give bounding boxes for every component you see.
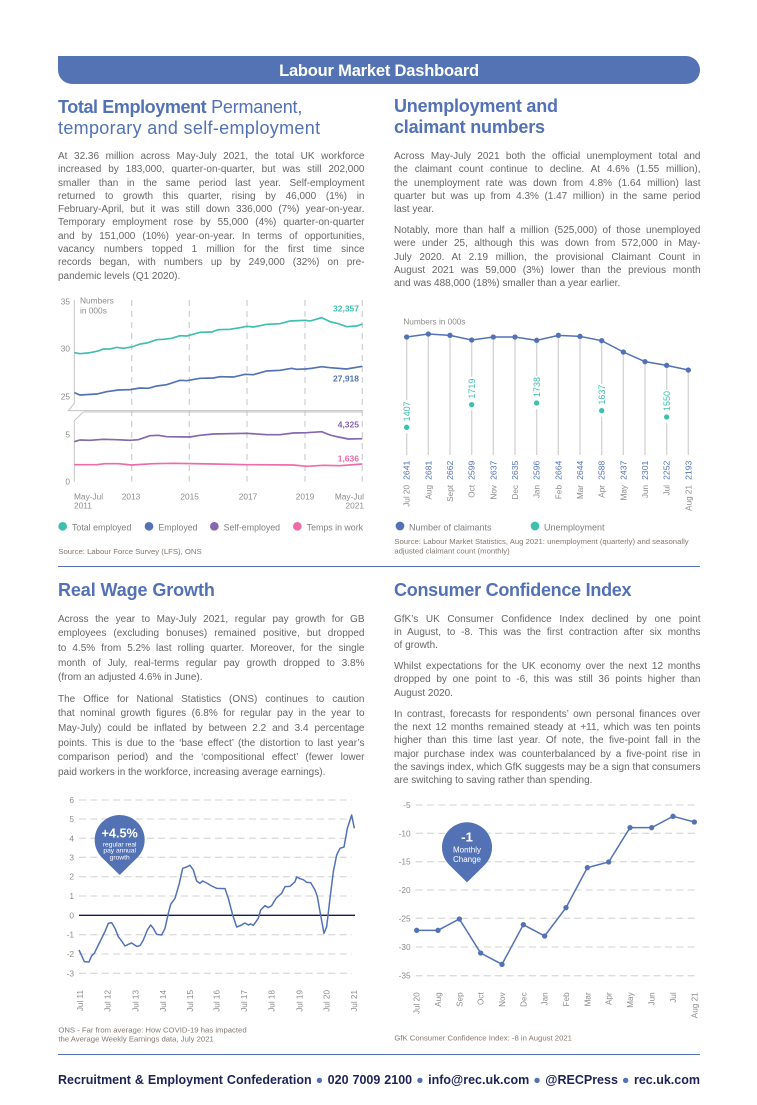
line chart: employment: 2013 bbox=[122, 491, 141, 501]
panel: total employment bbox=[58, 96, 364, 556]
line chart: employment: 4,325 bbox=[338, 419, 359, 429]
line chart: real wage growth: Jul 19 bbox=[295, 990, 304, 1012]
line chart: employment bbox=[58, 296, 364, 556]
line chart: real wage growth: Jul 20 bbox=[323, 990, 332, 1012]
lollipop chart: claimants and unemployment: 1637 bbox=[597, 385, 607, 405]
text block: unemployment first paragraph: last year. bbox=[394, 204, 434, 215]
line chart: real wage growth: ONS - Far from average: How COVID-19 has impacted bbox=[58, 1026, 247, 1035]
text block: unemployment second paragraph: Notably, more than half a million (525,000) of those unemployed bbox=[394, 225, 700, 236]
lollipop chart: claimants and unemployment: Aug bbox=[424, 485, 433, 500]
line chart: employment: 0 bbox=[65, 476, 70, 486]
lollipop chart: claimants and unemployment: adjusted claimant count (monthly) bbox=[394, 547, 510, 556]
callout: +4.5% pin bbox=[95, 815, 145, 875]
text block: wage growth first paragraph: Across the year to May-July 2021, regular pay growth for GB bbox=[58, 614, 364, 624]
line chart: employment: 32,357 bbox=[333, 304, 359, 314]
text block: total employment: returned to growth this quarter, rising by 46,000 (1%) in bbox=[58, 191, 364, 202]
callout: +4.5% pin: growth bbox=[110, 854, 130, 861]
text block: confidence third paragraph: the savings index, which GfK suggests may be a sign that consumers bbox=[394, 762, 700, 773]
lollipop chart: claimants and unemployment: Jan bbox=[533, 485, 542, 498]
line chart: consumer confidence: -20 bbox=[399, 885, 411, 895]
line chart: employment: 25 bbox=[61, 392, 70, 402]
text block: unemployment second paragraph: July 2020. At 2.19 million, the provisional Claimant Count in bbox=[394, 252, 700, 263]
text block: wage growth second paragraph: points. This is due to the ‘base effect’ (the distortion to last year’s bbox=[58, 738, 364, 749]
line chart: employment: 30 bbox=[61, 344, 70, 354]
lollipop chart: claimants and unemployment: Jul 20 bbox=[403, 485, 412, 507]
line chart: consumer confidence bbox=[394, 800, 699, 1043]
line chart: real wage growth: -2 bbox=[67, 949, 74, 959]
lollipop chart: claimants and unemployment: Source: Labour Market Statistics, Aug 2021: unemployment (quarterly) and seasonally bbox=[394, 537, 689, 546]
text block: unemployment first paragraph: Across May-July 2021 both the official unemployment total and bbox=[394, 151, 700, 162]
line chart: employment: Self-employed bbox=[224, 523, 280, 533]
text block: wage growth first paragraph: employees (excluding bonuses) remained positive, but dropped bbox=[58, 628, 364, 639]
line chart: real wage growth: 4 bbox=[69, 833, 74, 843]
text block: unemployment second paragraph: and was 488,000 (18%) smaller than a year earlier. bbox=[394, 278, 620, 289]
lollipop chart: claimants and unemployment: 2664 bbox=[553, 460, 563, 480]
text block: wage growth first paragraph bbox=[58, 614, 364, 683]
line chart: employment: 27,918 bbox=[333, 374, 359, 384]
text block: unemployment first paragraph: the claimant count continue to decline. At 4.6% (1.55 million), bbox=[394, 164, 700, 175]
lollipop chart: claimants and unemployment: Number of claimants bbox=[409, 523, 492, 533]
heading: real wage growth: Real Wage Growth bbox=[58, 580, 215, 600]
line chart: employment: 2017 bbox=[239, 491, 258, 501]
line chart: consumer confidence: -5 bbox=[403, 800, 411, 810]
text block: total employment: vacancy numbers topped 1 million for the first time since bbox=[58, 244, 364, 255]
lollipop chart: claimants and unemployment: 1719 bbox=[467, 379, 477, 399]
line chart: employment: 2021 bbox=[345, 501, 364, 511]
text block: confidence third paragraph: higher than this time last year. Of note, the five-point fall in the bbox=[394, 735, 700, 746]
line chart: real wage growth: Jul 21 bbox=[350, 990, 359, 1012]
lollipop chart: claimants and unemployment: Jul bbox=[663, 485, 672, 495]
heading: total employment bbox=[58, 96, 320, 138]
line chart: employment: Employed bbox=[158, 523, 198, 533]
line chart: real wage growth bbox=[58, 795, 359, 1044]
title banner bbox=[58, 56, 700, 84]
text block: wage growth first paragraph: (from an adjusted 4.6% in June). bbox=[58, 672, 203, 683]
text block: total employment: and by 151,000 (10%) year-on-year. In terms of opportunities, bbox=[58, 231, 364, 242]
heading: total employment: temporary and self-employment bbox=[58, 118, 320, 138]
text block: confidence third paragraph: major purchase index was counterbalanced by a five-point rise in bbox=[394, 749, 700, 760]
text block: confidence first paragraph: in August, to -8. This was the first contraction after six months bbox=[394, 627, 700, 638]
line chart: consumer confidence: Apr bbox=[605, 992, 614, 1005]
text block: unemployment first paragraph: quarter but was up from 4.3% (1.47 million) in the same period bbox=[394, 191, 700, 202]
panel: real wage growth bbox=[58, 580, 364, 1044]
line chart: employment: May-Jul bbox=[74, 491, 103, 501]
lollipop chart: claimants and unemployment: 2599 bbox=[467, 460, 477, 480]
text block: confidence second paragraph: Whilst expectations for the UK economy over the next 12 months bbox=[394, 661, 700, 672]
line chart: real wage growth: 3 bbox=[69, 852, 74, 862]
line chart: real wage growth: 2 bbox=[69, 872, 74, 882]
text block: confidence second paragraph bbox=[394, 661, 700, 699]
line chart: employment: Source: Labour Force Survey (LFS), ONS bbox=[58, 547, 202, 556]
line chart: real wage growth: Jul 11 bbox=[76, 990, 85, 1011]
line chart: consumer confidence: Jun bbox=[648, 992, 657, 1005]
lollipop chart: claimants and unemployment: May bbox=[619, 484, 628, 500]
heading: total employment: Total Employment Permanent, bbox=[58, 96, 302, 116]
line chart: real wage growth: Jul 15 bbox=[186, 990, 195, 1012]
line chart: employment: Numbers bbox=[80, 296, 114, 306]
callout: monthly change pin: Change bbox=[453, 855, 482, 864]
text block: total employment: pandemic levels (Q1 2020). bbox=[58, 271, 180, 282]
lollipop chart: claimants and unemployment: 1550 bbox=[662, 391, 672, 411]
line chart: consumer confidence: -15 bbox=[399, 857, 411, 867]
line chart: real wage growth: 1 bbox=[69, 891, 74, 901]
line chart: employment: 2019 bbox=[296, 491, 315, 501]
line chart: employment: Total employed bbox=[72, 523, 131, 533]
text block: unemployment second paragraph: August 2021 was 59,000 (3%) lower than the previous month bbox=[394, 265, 700, 276]
callout: monthly change pin: -1 bbox=[461, 829, 474, 844]
text block: confidence first paragraph: of growth. bbox=[394, 640, 438, 651]
lollipop chart: claimants and unemployment: Numbers in 000s bbox=[403, 317, 465, 326]
text block: wage growth second paragraph: May-July) could be inflated by between 2.2 and 3.4 percentage bbox=[58, 723, 364, 734]
line chart: real wage growth: Jul 16 bbox=[213, 990, 222, 1012]
lollipop chart: claimants and unemployment: Feb bbox=[554, 485, 563, 499]
text block: confidence third paragraph: the next 12 months remained steady at +11, which was ten points bbox=[394, 722, 700, 733]
footer contact line: Recruitment & Employment Confederation ● 020 7009 2100 ● info@rec.uk.com ● @RECPress ● rec.uk.com bbox=[58, 1073, 700, 1087]
lollipop chart: claimants and unemployment: 2437 bbox=[618, 460, 628, 480]
lollipop chart: claimants and unemployment: Aug 21 bbox=[684, 485, 693, 511]
title banner: Labour Market Dashboard bbox=[279, 62, 479, 80]
line chart: real wage growth: -1 bbox=[67, 930, 74, 940]
line chart: consumer confidence: Jan bbox=[541, 992, 550, 1005]
line chart: real wage growth: 0 bbox=[69, 910, 74, 920]
line chart: real wage growth: Jul 12 bbox=[104, 990, 113, 1012]
callout: +4.5% pin: +4.5% bbox=[102, 827, 138, 841]
text block: confidence third paragraph: are switching to saving rather than spending. bbox=[394, 775, 592, 786]
text block: total employment: At 32.36 million across May-July 2021, the total UK workforce bbox=[58, 151, 364, 162]
line chart: real wage growth: Jul 18 bbox=[268, 990, 277, 1012]
line chart: consumer confidence: Nov bbox=[498, 991, 507, 1007]
text block: wage growth second paragraph: paid workers in the workforce, increasing average earnings). bbox=[58, 767, 325, 778]
line chart: employment: 1,636 bbox=[338, 454, 359, 464]
line chart: employment: in 000s bbox=[80, 306, 107, 316]
line chart: consumer confidence: Feb bbox=[562, 992, 571, 1006]
lollipop chart: claimants and unemployment: 2193 bbox=[683, 460, 693, 480]
lollipop chart: claimants and unemployment: 2662 bbox=[445, 460, 455, 480]
line chart: consumer confidence: Mar bbox=[583, 992, 592, 1006]
lollipop chart: claimants and unemployment: Unemployment bbox=[544, 523, 605, 533]
lollipop chart: claimants and unemployment: 2644 bbox=[575, 460, 585, 480]
lollipop chart: claimants and unemployment: 2252 bbox=[662, 460, 672, 480]
lollipop chart: claimants and unemployment: Mar bbox=[576, 485, 585, 499]
heading: unemployment: claimant numbers bbox=[394, 117, 545, 137]
text block: confidence first paragraph: GfK’s UK Consumer Confidence Index declined by one point bbox=[394, 614, 700, 625]
lollipop chart: claimants and unemployment: 2635 bbox=[510, 460, 520, 480]
line chart: consumer confidence: Sep bbox=[455, 992, 464, 1007]
line chart: consumer confidence: Jul bbox=[669, 992, 678, 1003]
line chart: consumer confidence: Oct bbox=[477, 992, 486, 1005]
lollipop chart: claimants and unemployment: Dec bbox=[511, 485, 520, 500]
heading: unemployment: Unemployment and bbox=[394, 96, 558, 116]
line chart: consumer confidence: GfK Consumer Confidence Index: -8 in August 2021 bbox=[394, 1034, 572, 1043]
line chart: consumer confidence: Aug bbox=[434, 992, 443, 1007]
line chart: real wage growth: 5 bbox=[69, 814, 74, 824]
callout: monthly change pin bbox=[442, 822, 492, 882]
line chart: consumer confidence: Dec bbox=[519, 992, 528, 1007]
heading: unemployment bbox=[394, 96, 558, 137]
line chart: employment: 2011 bbox=[74, 501, 92, 511]
line chart: real wage growth: the Average Weekly Earnings data, July 2021 bbox=[58, 1035, 214, 1044]
lollipop chart: claimants and unemployment: 2637 bbox=[488, 460, 498, 480]
panel: unemployment bbox=[394, 96, 700, 556]
line chart: real wage growth: -3 bbox=[67, 968, 74, 978]
line chart: employment: 5 bbox=[65, 430, 70, 440]
line chart: consumer confidence: May bbox=[626, 991, 635, 1008]
line chart: consumer confidence: -25 bbox=[399, 913, 411, 923]
text block: total employment bbox=[58, 151, 364, 282]
text block: unemployment first paragraph bbox=[394, 151, 700, 215]
text block: unemployment second paragraph bbox=[394, 225, 700, 289]
text block: total employment: Temporary employment rose by 55,000 (4%) quarter-on-quarter bbox=[58, 217, 364, 228]
text block: wage growth first paragraph: month of July, real-terms regular pay growth dropped to 3.8% bbox=[58, 658, 364, 669]
line chart: real wage growth: 6 bbox=[69, 795, 74, 805]
lollipop chart: claimants and unemployment: Apr bbox=[598, 485, 607, 498]
lollipop chart: claimants and unemployment: 2681 bbox=[423, 460, 433, 480]
lollipop chart: claimants and unemployment bbox=[394, 317, 693, 556]
line chart: employment: Temps in work bbox=[307, 523, 364, 533]
lollipop chart: claimants and unemployment: 2596 bbox=[532, 460, 542, 480]
lollipop chart: claimants and unemployment: 1407 bbox=[402, 401, 412, 421]
callout: +4.5% pin: regular real bbox=[103, 841, 137, 848]
text block: confidence second paragraph: August 2020. bbox=[394, 688, 453, 699]
lollipop chart: claimants and unemployment: 2641 bbox=[402, 460, 412, 480]
lollipop chart: claimants and unemployment: Oct bbox=[468, 484, 477, 498]
lollipop chart: claimants and unemployment: 2588 bbox=[597, 460, 607, 480]
text block: wage growth second paragraph: The Office for National Statistics (ONS) continues to caution bbox=[58, 694, 364, 704]
line chart: consumer confidence: -10 bbox=[399, 828, 411, 838]
line chart: consumer confidence: -30 bbox=[399, 942, 411, 952]
lollipop chart: claimants and unemployment: 2301 bbox=[640, 460, 650, 480]
text block: confidence second paragraph: dropped by one point to -6, this was still 36 points higher than bbox=[394, 674, 700, 685]
line chart: employment: 2015 bbox=[180, 491, 199, 501]
text block: total employment: February-April, but it was still down 336,000 (7%) year-on-year. bbox=[58, 204, 364, 215]
line chart: real wage growth: Jul 17 bbox=[240, 990, 249, 1012]
text block: total employment: increased by 183,000, quarter-on-quarter, but was still 202,000 bbox=[58, 164, 364, 175]
text block: confidence third paragraph: In contrast, forecasts for respondents’ own personal finances over bbox=[394, 709, 700, 720]
text block: confidence third paragraph bbox=[394, 709, 700, 786]
text block: wage growth second paragraph: comparison period) and the ‘compositional effect’ (fewer lower bbox=[58, 752, 364, 763]
line chart: employment: 35 bbox=[61, 296, 70, 306]
text block: total employment: records began, with numbers up by 249,000 (32%) on pre- bbox=[58, 257, 364, 268]
line chart: real wage growth: Jul 13 bbox=[131, 990, 140, 1012]
heading: consumer confidence: Consumer Confidence Index bbox=[394, 580, 631, 600]
text block: wage growth second paragraph bbox=[58, 694, 364, 778]
lollipop chart: claimants and unemployment: Jun bbox=[641, 485, 650, 498]
text block: unemployment second paragraph: were under 25, although this was down from 572,000 in May- bbox=[394, 238, 700, 249]
text block: wage growth first paragraph: to 4.5% from 5.2% last rolling quarter. Moreover, for the single bbox=[58, 643, 364, 654]
line chart: consumer confidence: -35 bbox=[399, 971, 411, 981]
line chart: consumer confidence: Aug 21 bbox=[690, 992, 699, 1018]
panel: consumer confidence bbox=[394, 580, 700, 1043]
line chart: consumer confidence: Jul 20 bbox=[413, 992, 422, 1014]
lollipop chart: claimants and unemployment: Sept bbox=[446, 484, 455, 502]
text block: total employment: smaller than in the same period last year. Self-employment bbox=[58, 178, 364, 189]
line chart: employment: May-Jul bbox=[335, 491, 364, 501]
callout: monthly change pin: Monthly bbox=[453, 846, 481, 855]
lollipop chart: claimants and unemployment: Nov bbox=[489, 484, 498, 500]
callout: +4.5% pin: pay annual bbox=[103, 848, 136, 855]
line chart: real wage growth: Jul 14 bbox=[159, 990, 168, 1012]
text block: wage growth second paragraph: that nominal growth figures (6.8% for regular pay in the year to bbox=[58, 708, 364, 719]
text block: confidence first paragraph bbox=[394, 614, 700, 651]
lollipop chart: claimants and unemployment: 1738 bbox=[532, 377, 542, 397]
text block: unemployment first paragraph: the unemployment rate was down from 4.8% (1.64 million) last bbox=[394, 178, 700, 189]
